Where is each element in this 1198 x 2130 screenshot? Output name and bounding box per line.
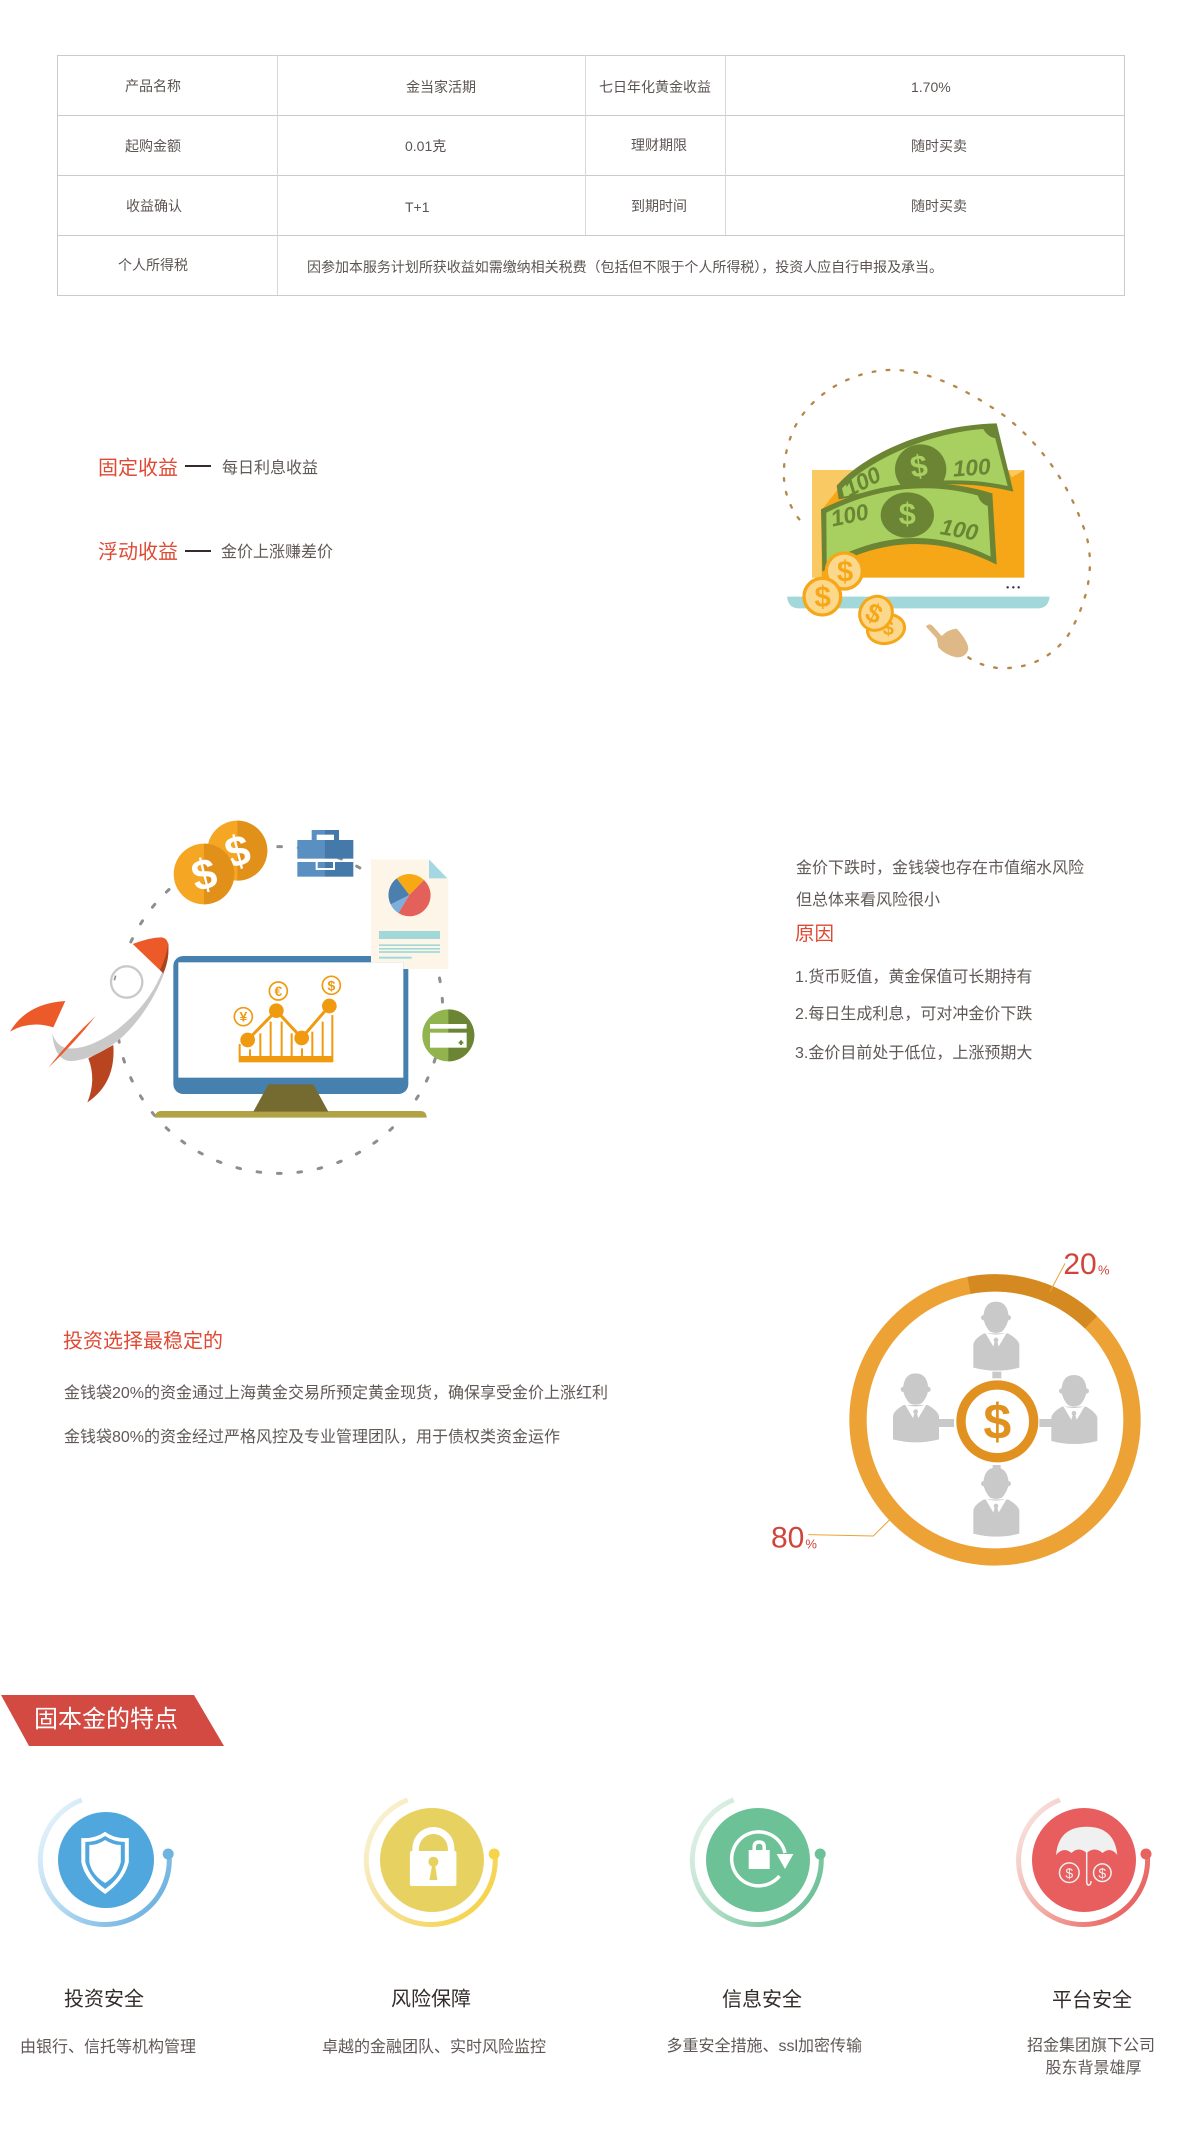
20% arc (969, 1283, 1091, 1322)
section banner (1, 1695, 224, 1746)
product info table (57, 55, 1124, 296)
gold coins (174, 821, 267, 904)
dashed loop (784, 370, 1090, 668)
gold coins: $ (187, 849, 222, 901)
row 1 (125, 78, 951, 95)
feature: platform security (1019, 1800, 1155, 2077)
risk explanation text: 金价下跌时，金钱袋也存在市值缩水风险 (796, 859, 1084, 877)
rocket (10, 937, 168, 1102)
80% label: 80 (771, 1522, 804, 1555)
row 4: 个人所得税 (118, 257, 188, 273)
80% label (771, 1520, 889, 1555)
feature: platform security: 招金集团旗下公司 (1027, 2036, 1155, 2054)
icon: umbrella with coins (1019, 1800, 1152, 1925)
feature: platform security: 平台安全 (1052, 1988, 1132, 2012)
row 2 (125, 137, 967, 154)
gold coins: $ (815, 581, 831, 614)
back banknote (837, 423, 1013, 502)
feature: investment safety: 由银行、信托等机构管理 (20, 2038, 196, 2056)
row 1: 金当家活期 (406, 79, 476, 95)
20% label (1050, 1248, 1110, 1292)
dashed orbit (116, 847, 443, 1173)
illustration: money and coins (784, 370, 1090, 668)
gold coins (804, 553, 907, 647)
feature: investment safety: 投资安全 (64, 1988, 144, 2010)
monitor chart (234, 976, 340, 1062)
row 2: 0.01克 (405, 138, 446, 154)
row 2: 起购金额 (125, 138, 181, 154)
card icon (422, 1009, 474, 1061)
80% ring (858, 1283, 1132, 1557)
20% label: % (1098, 1263, 1110, 1278)
monitor (155, 956, 427, 1118)
row 3: 收益确认 (126, 198, 182, 214)
monitor chart: $ (327, 977, 335, 993)
feature: information security: 多重安全措施、ssl加密传输 (666, 2037, 862, 2055)
80% label: % (805, 1537, 817, 1552)
centre dollar coin (961, 1385, 1034, 1458)
back banknote: 100 (952, 453, 992, 482)
reasons list (795, 968, 1032, 1062)
investment allocation text: 金钱袋20%的资金通过上海黄金交易所预定黄金现货，确保享受金价上涨红利 (64, 1384, 608, 1402)
feature: risk protection (322, 1800, 546, 2056)
icon: umbrella with coins: $ (1098, 1865, 1106, 1881)
risk explanation text (795, 859, 1084, 1062)
investment allocation text (63, 1330, 608, 1446)
back banknote: $ (908, 449, 930, 485)
reasons list: 3.金价目前处于低位，上涨预期大 (795, 1044, 1032, 1062)
row 3: 到期时间 (631, 198, 687, 214)
monitor chart: € (274, 983, 282, 999)
row 1: 七日年化黄金收益 (599, 79, 711, 95)
row 1: 1.70% (911, 79, 951, 95)
icon: padlock (366, 1800, 500, 1925)
row 1: 产品名称 (125, 78, 181, 94)
investment allocation text: 金钱袋80%的资金经过严格风控及专业管理团队，用于债权类资金运作 (64, 1428, 560, 1446)
risk explanation text: 但总体来看风险很小 (796, 891, 940, 909)
gold coins: $ (861, 597, 887, 630)
row 4 (118, 257, 943, 275)
connected people (893, 1302, 1097, 1537)
floating income (98, 540, 333, 564)
investment allocation text: 投资选择最稳定的 (63, 1330, 223, 1352)
floating income: 金价上涨赚差价 (221, 543, 333, 561)
floating income: 浮动收益 (98, 540, 178, 564)
row 2: 理财期限 (631, 137, 687, 153)
monitor chart: ¥ (239, 1009, 247, 1025)
reasons list: 1.货币贬值，黄金保值可长期持有 (795, 968, 1032, 986)
gold coins: $ (837, 555, 853, 588)
gold coins: $ (220, 826, 255, 878)
feature: platform security: 股东背景雄厚 (1046, 2059, 1142, 2077)
row 3 (126, 198, 967, 215)
front banknote: $ (899, 497, 916, 531)
front banknote: 100 (828, 498, 871, 532)
row 3: 随时买卖 (911, 198, 967, 214)
row 2: 随时买卖 (911, 138, 967, 154)
income types text (98, 456, 333, 564)
fixed income: 固定收益 (98, 456, 178, 480)
donut chart: 20% and 80% (771, 1248, 1132, 1557)
pointing hand (926, 624, 968, 657)
orange envelope (812, 470, 1024, 578)
fixed income: 每日利息收益 (222, 459, 318, 477)
feature: information security (666, 1800, 862, 2055)
reasons heading: 原因 (795, 923, 834, 945)
row 3: T+1 (405, 199, 430, 215)
front banknote: 100 (938, 513, 981, 546)
report document (371, 859, 448, 969)
icon: shield (40, 1800, 174, 1925)
row 4: 因参加本服务计划所获收益如需缴纳相关税费（包括但不限于个人所得税），投资人应自行申报及承当。 (307, 259, 943, 275)
20% label: 20 (1063, 1248, 1097, 1281)
feature: investment safety (20, 1800, 196, 2056)
feature: risk protection: 风险保障 (391, 1988, 471, 2010)
gold coins: $ (883, 618, 894, 640)
feature: information security: 信息安全 (722, 1988, 802, 2011)
front banknote (821, 483, 997, 572)
briefcase (297, 830, 353, 877)
centre dollar coin: $ (983, 1394, 1011, 1450)
reasons list: 2.每日生成利息，可对冲金价下跌 (795, 1005, 1032, 1023)
back banknote: 100 (839, 461, 885, 502)
icon: umbrella with coins: $ (1065, 1865, 1073, 1881)
laptop base (787, 586, 1050, 608)
feature: risk protection: 卓越的金融团队、实时风险监控 (322, 2038, 546, 2056)
section banner: 固本金的特点 (34, 1706, 178, 1733)
illustration: rocket and monitor (10, 821, 474, 1173)
icon: rotating lock (692, 1800, 826, 1925)
fixed income (98, 456, 318, 480)
